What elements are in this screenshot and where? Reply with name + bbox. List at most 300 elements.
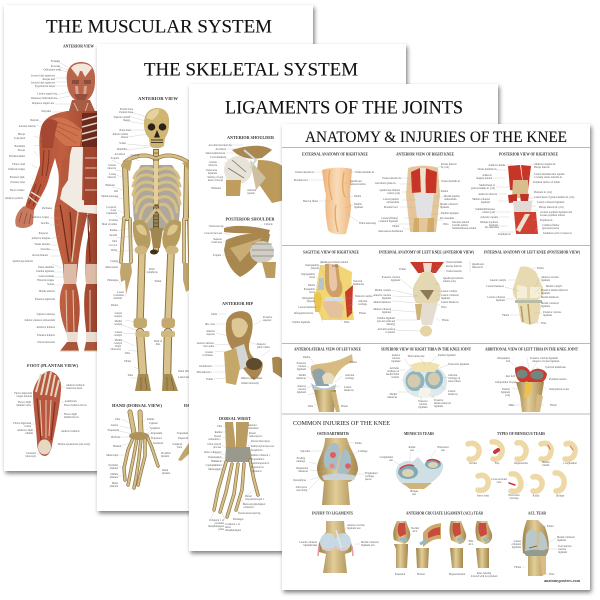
- labels: external knee: ligament: [354, 206, 363, 209]
- labels: posterior view: gastrocnemius m. (cut): [471, 187, 495, 190]
- labels: dorsal wrist: radioulnar: [248, 427, 259, 430]
- labels: anterolateral knee: cruciate: [298, 365, 307, 368]
- labels: osteoarthritis: Osteophytes: [293, 479, 306, 482]
- labels: muscular body: Sartorius: [41, 248, 50, 251]
- labels: internal knee anterior: Lateral condyle: [441, 290, 458, 293]
- labels: acl tear sequence: Extension: [395, 573, 406, 576]
- title: anatomy and injuries of the knee: ANATOMY & INJURIES OF THE KNEE: [305, 129, 567, 146]
- labels: internal knee anterior: Rectus femoris: [446, 265, 462, 268]
- labels: anterior view: Vastus lateralis m.: [382, 177, 401, 180]
- labels: hand skeleton: Trapezoid: [151, 437, 162, 440]
- labels: meniscus tears: Radial: [409, 446, 416, 449]
- labels: meniscus tears: tear: [441, 449, 445, 452]
- labels: osteoarthritis: Femur: [355, 442, 362, 445]
- labels: dorsal wrist: radiocarpal l.: [249, 435, 263, 438]
- labels: abditional tibia: Alar fold: [506, 375, 516, 378]
- labels: external knee: Tibial tuberosity: [359, 222, 377, 225]
- labels: dorsal wrist: Scaphoid b.: [251, 449, 264, 452]
- labels: posterior view: [471, 163, 574, 236]
- labels: types of meniscus tears: cleavage: [509, 497, 519, 500]
- labels: hand skeleton: Distal tibia: [178, 370, 190, 373]
- labels: anterior view: collateral ligament: [379, 220, 398, 223]
- labels: anterior hip: Inferior pubic ramus: [241, 377, 262, 380]
- labels: skeleton: tubercle: [108, 167, 117, 170]
- labels: anterior view: [375, 163, 477, 233]
- labels: posterior view: Medial head of: [479, 184, 495, 187]
- labels: anterior shoulder: ligament: [208, 172, 217, 175]
- labels: abditional tibia: Synovial membrane: [545, 366, 567, 369]
- labels: internal knee posterior: Anterior cruciate: [541, 276, 559, 279]
- labels: muscular body: Palmaris longus: [8, 168, 25, 171]
- labels: external knee: Quadriceps: [350, 180, 362, 183]
- labels: posterior shoulder: Clavicle: [264, 223, 273, 226]
- labels: dorsal wrist: proximal: [215, 522, 224, 525]
- labels: external knee: [294, 171, 377, 225]
- labels: external knee: Patella: [354, 195, 362, 198]
- labels: types of meniscus tears: Parrot beak: [477, 494, 490, 498]
- labels: sagittal knee: (fatpad): [311, 267, 319, 270]
- labels: superior tibia: cartilage on: [387, 370, 400, 373]
- labels: sagittal knee: Suprapatellar: [301, 273, 315, 276]
- labels: sagittal knee: (fatpad): [307, 300, 315, 303]
- labels: posterior view: Adductor: [482, 174, 492, 177]
- labels: anterolateral knee: ligament: [297, 391, 306, 394]
- labels: injury to ligaments: ligament tear: [303, 544, 317, 547]
- labels: foot plantar view: Abductor hallucis: [61, 430, 80, 433]
- labels: hand skeleton: Proximal: [108, 464, 118, 467]
- labels: posterior view: Tendinous arch of soleus m.: [543, 232, 572, 235]
- labels: anterior shoulder: Transverse: [206, 169, 218, 172]
- labels: internal knee posterior: Medial condyle: [546, 285, 563, 288]
- labels: skeleton: Pubis: [111, 249, 117, 252]
- labels: posterior shoulder: Coracoid process: [204, 232, 222, 235]
- labels: dorsal wrist: Dorsal: [214, 435, 221, 438]
- labels: muscular body: Patellar ligament: [36, 270, 54, 273]
- labels: hand skeleton: Pisiform: [111, 436, 120, 439]
- labels: superior tibia: Articular: [448, 374, 457, 377]
- labels: internal knee anterior: femoris m.: [472, 266, 484, 269]
- labels: muscular body: Long head: [14, 137, 26, 140]
- labels: dorsal wrist: Dorsal intercarpal: [251, 440, 270, 443]
- labels: dorsal wrist: Phalanges: [233, 518, 244, 521]
- labels: skeleton: tuberosity: [111, 348, 122, 351]
- figure: internal knee anterior: [410, 262, 444, 336]
- figure: external knee: [322, 168, 352, 234]
- labels: skeleton: Pubic: [149, 268, 156, 271]
- labels: injury to ligaments: ligament tear: [347, 527, 361, 530]
- labels: anterior view: Medial patellar: [444, 195, 460, 198]
- labels: acl tear detail: [511, 525, 575, 576]
- labels: internal knee anterior: of patella: [385, 331, 396, 334]
- labels: hand skeleton: Distal: [162, 469, 168, 472]
- labels: muscular body: Vastus lateralis: [34, 243, 50, 246]
- labels: types of meniscus tears: Bucket: [542, 461, 550, 464]
- labels: skeleton: Frontal bone: [120, 108, 134, 111]
- labels: sagittal knee: bursa: [309, 276, 316, 279]
- labels: osteoarthritis: pieces: [365, 478, 371, 481]
- labels: meniscus tears: Oblique: [410, 490, 419, 493]
- labels: foot plantar view: Flexor digiti: [64, 413, 77, 416]
- labels: posterior view: Articular capsule: [480, 216, 499, 219]
- labels: hand skeleton: Scaphoid: [150, 427, 160, 430]
- labels: muscular body: Biceps: [18, 133, 25, 136]
- labels: muscular body: Pronator teres: [11, 181, 25, 184]
- labels: external knee: Vastus lateralis m.: [295, 171, 314, 174]
- figure: osteoarthritis: [317, 438, 358, 505]
- labels: anterior shoulder: Acromion: [215, 148, 227, 151]
- labels: hand skeleton: phalanx: [161, 455, 170, 458]
- figure: muscular body: [15, 62, 100, 351]
- labels: posterior shoulder: Scapula: [213, 254, 222, 257]
- labels: muscular body: Brachialis: [14, 145, 25, 148]
- labels: hand skeleton: Proximal: [161, 452, 171, 455]
- labels: internal knee anterior: Anterior cruciate: [373, 294, 392, 297]
- labels: internal knee anterior: Tibia: [441, 306, 447, 309]
- title: the muscular system: THE MUSCULAR SYSTEM: [46, 16, 272, 38]
- labels: osteoarthritis: Cartilage: [358, 450, 368, 453]
- labels: anterior shoulder: Humerus: [211, 187, 221, 190]
- heading: posterior shoulder: POSTERIOR SHOULDER: [226, 218, 275, 222]
- heading: abditional view: ABDITIONAL VIEW OF LEFT TIBIA IN THE KNEE JOINT: [485, 348, 578, 352]
- labels: posterior view: Popliteus m.: [540, 219, 553, 222]
- labels: dorsal wrist: Ulna: [217, 425, 223, 428]
- labels: dorsal wrist: Triquetrum b.: [208, 456, 222, 459]
- labels: acl tear detail: Fibula: [514, 566, 522, 569]
- labels: dorsal wrist: Trapezium b.: [251, 458, 265, 461]
- labels: anterior shoulder: tubercle: [209, 164, 218, 167]
- labels: internal knee posterior: Tibia: [541, 322, 547, 325]
- labels: hand skeleton: Capitate: [149, 422, 158, 425]
- labels: internal knee anterior: tendon (cut): [443, 280, 456, 283]
- labels: dorsal wrist: process: [213, 446, 221, 449]
- labels: foot plantar view: Calcaneal: [26, 452, 36, 455]
- labels: posterior view: Adductor magnus m.: [534, 163, 556, 166]
- labels: internal knee posterior: Fibula: [502, 314, 510, 317]
- labels: meniscus tears: Longitudinal: [380, 456, 393, 459]
- labels: anterolateral knee: Posterior: [297, 362, 306, 365]
- labels: hand skeleton: Triquetrum: [107, 429, 119, 432]
- labels: anterior view: Fibula: [392, 225, 400, 228]
- labels: anterior hip: iliac spine: [203, 345, 215, 348]
- labels: internal knee posterior: Medial meniscus: [541, 296, 559, 299]
- labels: abditional tibia: Posterior cruciate ligament: [530, 357, 558, 360]
- labels: meniscus tears: tear: [389, 459, 393, 462]
- labels: muscular body: Depressor labii inferioris: [31, 97, 57, 100]
- labels: posterior view: Popliteus m.: [498, 233, 511, 236]
- labels: skeleton: Greater: [108, 164, 116, 167]
- labels: types of meniscus tears: view: [496, 481, 502, 484]
- labels: sagittal knee: bursa: [309, 291, 316, 294]
- labels: foot plantar view: brevis: [25, 425, 31, 428]
- labels: dorsal wrist: radioulnar l.: [208, 438, 221, 441]
- labels: superior tibia: Posterior: [418, 400, 428, 403]
- labels: superior tibia: meniscofemoral: [434, 402, 451, 405]
- labels: muscular body: Brachioradialis: [9, 155, 25, 158]
- labels: muscular body: Iliopsoas: [39, 232, 48, 235]
- labels: skeleton: Medial: [115, 339, 122, 342]
- labels: superior tibia: medial tibial: [386, 373, 399, 376]
- labels: osteoarthritis: Fragmented: [365, 472, 378, 475]
- labels: dorsal wrist: Collateral l. of: [209, 519, 224, 522]
- labels: anterior hip: superior: [206, 333, 215, 336]
- labels: muscular body: Rectus femoris: [32, 254, 48, 257]
- labels: skeleton: tubercle: [108, 176, 117, 179]
- labels: posterior view: Lateral head of gastrocnemius m. (cut): [534, 196, 574, 199]
- labels: anterior shoulder: Acromioclavicular lig.: [209, 144, 232, 147]
- labels: skeleton: Scapula: [111, 157, 120, 160]
- labels: muscular body: Levator anguli oris: [37, 92, 57, 96]
- labels: abditional tibia: Infrapatellar: [497, 357, 510, 360]
- labels: external knee: femoris tendon: [350, 183, 366, 186]
- labels: skeleton: tibia: [156, 343, 161, 346]
- labels: anterolateral knee: Femur: [350, 361, 357, 364]
- figure: acl tear sequence: [393, 521, 492, 568]
- labels: foot plantar view: Flexor digitorum: [14, 392, 32, 395]
- labels: hand skeleton: bone: [177, 446, 183, 449]
- heading: hand dorsal view: HAND (DORSAL VIEW): [112, 404, 163, 408]
- labels: anterior view: Sartorius tendon: [452, 221, 470, 224]
- labels: foot plantar view: Flexor digiti: [18, 401, 31, 404]
- labels: muscular body: Triceps: [17, 149, 25, 152]
- labels: posterior view: Adductor tubercle: [478, 193, 498, 196]
- figure: internal knee posterior: [513, 266, 543, 325]
- labels: injury to ligaments: Medial collateral: [361, 541, 379, 544]
- labels: foot plantar view: Flexor digitorum: [13, 422, 31, 425]
- labels: anterior hip: Anterior inferior: [197, 342, 214, 345]
- labels: acl tear sequence: Normal: [411, 527, 419, 530]
- heading: injury to ligaments: INJURY TO LIGAMENTS: [312, 512, 353, 516]
- labels: anterior view: tendon (cut): [387, 192, 400, 195]
- labels: hand skeleton: Metacarpal: [106, 454, 118, 457]
- labels: internal knee anterior: ligament: [382, 297, 391, 300]
- labels: dorsal wrist: Ulnar styloid: [207, 443, 222, 446]
- labels: anterolateral knee: ligament: [297, 368, 306, 371]
- labels: hand skeleton: Ulna: [115, 418, 121, 421]
- labels: acl tear sequence: Knee twisting: [477, 572, 492, 575]
- labels: dorsal wrist: Capitohamate l.: [206, 464, 222, 467]
- figure: posterior knee: [508, 165, 538, 234]
- labels: hand skeleton: Middle: [110, 473, 119, 476]
- labels: anterior view: Patellar ligament: [441, 212, 459, 215]
- labels: dorsal wrist: distal: [225, 526, 231, 529]
- labels: internal knee anterior: [373, 261, 484, 334]
- labels: anterolateral knee: Fibula: [341, 405, 348, 408]
- figure: posterior shoulder: [224, 226, 276, 278]
- labels: skeleton: Talus: [127, 374, 133, 377]
- labels: sagittal knee: Synovial: [353, 280, 363, 283]
- labels: internal knee anterior: Medial condyle: [375, 289, 392, 292]
- labels: anterior view: Quadriceps femoris: [380, 189, 400, 192]
- labels: skeleton: Acromion: [114, 153, 126, 156]
- labels: hand skeleton: phalanx: [110, 476, 119, 479]
- labels: muscular body: Gastrocnemius: [38, 275, 54, 278]
- labels: injury to ligaments: ligament tear: [361, 544, 375, 547]
- labels: muscular body: Gracilis: [41, 222, 49, 225]
- labels: internal knee anterior: Vastus medialis: [446, 261, 462, 264]
- labels: anterior view: m. (cut): [441, 166, 449, 169]
- labels: skeleton: Lateral: [115, 312, 122, 315]
- labels: types of meniscus tears: Normal: [469, 462, 477, 465]
- labels: types of meniscus tears: Cross-sectional: [491, 478, 507, 481]
- labels: anterior view: Rectus femoris: [441, 163, 457, 166]
- labels: sagittal knee: membrane: [353, 283, 365, 286]
- labels: muscular body: Abductor hallucis: [36, 326, 55, 329]
- labels: dorsal wrist: Capitotrapezoid l.: [251, 462, 270, 465]
- labels: hand skeleton: phalanx: [110, 467, 119, 470]
- credit: anatomyposters.com: anatomyposters.com: [544, 578, 581, 583]
- figure: meniscus tears: [396, 457, 443, 489]
- labels: anterior view: Pes anserinus: [440, 217, 454, 220]
- labels: skeleton: symphysis: [147, 271, 157, 274]
- labels: anterior view: Interosseous membrane: [378, 230, 404, 233]
- labels: anterolateral knee: cartilage: [345, 377, 355, 380]
- heading: superior view: SUPERIOR VIEW OF RIGHT TIBIA IN THE KNEE JOINT: [381, 348, 471, 352]
- labels: sagittal knee: Quadriceps femoris tendon: [320, 261, 349, 264]
- labels: skeleton: Lateral: [115, 331, 122, 334]
- labels: internal knee anterior: Posterior cruciate: [382, 276, 401, 279]
- labels: sagittal knee: cartilage: [358, 303, 368, 306]
- labels: anterior hip: Anterior: [206, 330, 215, 333]
- labels: superior tibia: cruciate: [392, 357, 401, 360]
- labels: skeleton: Vomer: [119, 142, 126, 145]
- labels: foot plantar view: Lumbricals: [65, 400, 77, 403]
- labels: posterior shoulder: Superior: [213, 238, 222, 241]
- labels: internal knee posterior: [486, 267, 568, 325]
- labels: anterior shoulder: Coracohumeral: [210, 156, 226, 159]
- labels: anterolateral knee: Tibia: [308, 405, 314, 408]
- labels: anterior hip: Ilium: [211, 313, 217, 316]
- labels: injury to ligaments: [299, 524, 379, 547]
- labels: skeleton: Tibia: [125, 352, 131, 355]
- labels: hand skeleton: Trapezoid: [178, 437, 189, 440]
- labels: skeleton: Clavicle: [130, 154, 140, 157]
- labels: posterior view: Biceps femoris: [534, 166, 550, 169]
- labels: anterior hip: Greater: [205, 351, 213, 354]
- labels: acl tear detail: collateral: [511, 543, 521, 546]
- labels: dorsal wrist: Metacarpal l.: [208, 468, 222, 471]
- labels: anterior hip: Iliac crest: [205, 323, 215, 326]
- heading: external anatomy: EXTERNAL ANATOMY OF RIGHT KNEE: [302, 152, 368, 156]
- labels: types of meniscus tears: Horizontal: [508, 494, 520, 497]
- labels: types of meniscus tears: Flap: [495, 462, 500, 465]
- labels: muscular body: Levator labii superioris: [31, 82, 55, 84]
- labels: abditional tibia: Infrapatellar fat pad: [495, 381, 517, 384]
- figure: acl tear detail: [522, 520, 549, 576]
- labels: internal knee posterior: ligament: [543, 314, 552, 317]
- labels: superior tibia: ligament: [391, 360, 401, 363]
- labels: anterolateral knee: [296, 356, 357, 408]
- labels: posterior view: magnus tendon: [476, 177, 493, 180]
- labels: muscular body: Dorsal interossei: [37, 341, 55, 344]
- section: row one: [294, 152, 574, 236]
- labels: anterior view: Articularis genus m.: [375, 182, 396, 185]
- labels: skeleton: Tibial: [115, 345, 121, 348]
- labels: anterolateral knee: Articular: [345, 374, 354, 377]
- labels: skeleton: Sacrum: [109, 234, 117, 237]
- labels: skeleton: Humerus: [105, 184, 115, 187]
- labels: internal knee anterior: ligament: [382, 311, 391, 314]
- labels: muscular body: Fibularis longus: [37, 279, 54, 282]
- section: common injuries: [293, 420, 581, 583]
- labels: skeleton: Rib: [114, 190, 119, 193]
- labels: skeleton: condyle: [114, 342, 123, 345]
- labels: sagittal knee: Femur: [332, 265, 339, 268]
- labels: anterior view: Semitendinosus tendon: [452, 227, 477, 230]
- figure: anterior hip: [224, 311, 285, 385]
- labels: posterior view: Biceps femoris m. (cut): [539, 206, 564, 209]
- heading: internal anatomy posterior: INTERNAL ANATOMY OF LEFT KNEE (POSTERIOR VIEW): [484, 250, 581, 254]
- labels: acl tear detail: ligament: [558, 551, 567, 554]
- labels: superior tibia: Tibial tuberosity: [407, 355, 425, 358]
- labels: internal knee anterior: Medial meniscus: [373, 301, 391, 304]
- labels: anterior hip: Pubofemoral l.: [197, 371, 212, 374]
- heading: anterior hip: ANTERIOR HIP: [222, 302, 254, 306]
- labels: anterior hip: Posterior: [263, 316, 273, 319]
- labels: meniscus tears: [380, 446, 449, 496]
- labels: dorsal wrist: Hamate b.: [211, 460, 222, 463]
- labels: acl tear detail: ligament: [512, 546, 521, 549]
- labels: skeleton: Carpals: [110, 260, 118, 263]
- labels: skeleton: Radius: [110, 229, 117, 232]
- labels: dorsal wrist: Dorsal metacarpal lig.: [238, 512, 261, 515]
- labels: abditional tibia: Popliteus tendon: [549, 378, 567, 381]
- labels: sagittal knee: Fibula: [359, 312, 366, 315]
- labels: skeleton: Xiphoid process: [101, 195, 118, 198]
- section: row three: [294, 348, 578, 412]
- labels: muscular body: Depressor anguli oris: [32, 102, 54, 105]
- labels: anterior view: ligament: [440, 206, 449, 209]
- labels: superior tibia: Anterior: [392, 354, 401, 357]
- labels: dorsal wrist: Capitate b.: [251, 470, 263, 473]
- labels: dorsal wrist: Dorsal: [249, 432, 256, 435]
- labels: anterolateral knee: meniscus: [296, 377, 306, 380]
- labels: skeleton: Head of radius: [102, 223, 117, 226]
- labels: posterior view: (peroneal) nerve: [542, 227, 560, 230]
- labels: acl tear detail: Tibia: [549, 573, 555, 576]
- labels: anterior view: Vastus medialis m.: [441, 180, 461, 183]
- labels: superior tibia: cartilage on: [448, 377, 461, 380]
- labels: internal knee posterior: ligament: [541, 279, 550, 282]
- labels: sagittal knee: Patella: [308, 284, 316, 287]
- labels: anterior hip: Iliofemoral l.: [199, 365, 213, 368]
- labels: dorsal wrist: Radial styloid process: [251, 445, 274, 448]
- labels: posterior view: Adductor hiatus: [488, 164, 505, 167]
- labels: anterior view: Medial collateral: [440, 203, 458, 206]
- figure: superior tibia: [403, 362, 447, 398]
- labels: abditional tibia: ligament: [501, 391, 510, 394]
- labels: muscular body: Orbicularis oculi: [43, 68, 61, 72]
- labels: skeleton: Ulna: [112, 240, 118, 243]
- figure: anterior knee: [406, 166, 440, 232]
- labels: anterior shoulder: Articular: [247, 189, 256, 192]
- labels: foot plantar view: Abductor digiti: [17, 429, 33, 432]
- labels: muscular body: Platysma: [41, 110, 52, 113]
- figure: injury to ligaments: [318, 521, 353, 573]
- title: the skeletal system: THE SKELETAL SYSTEM: [144, 60, 358, 80]
- labels: internal knee anterior: Femur: [399, 268, 406, 271]
- labels: internal knee anterior: (cut and reflected: [377, 320, 396, 323]
- labels: superior tibia: ligament: [418, 406, 428, 409]
- labels: skeleton: Lesser: [109, 173, 116, 176]
- labels: foot plantar view: minimi brevis: [17, 404, 31, 407]
- labels: osteoarthritis: narrowing: [296, 489, 308, 492]
- labels: skeleton: condyle: [114, 334, 123, 337]
- labels: skeleton: fossa: [111, 209, 117, 212]
- labels: superior tibia: Patellar ligament: [438, 354, 456, 357]
- labels: posterior view: Plantaris m. (cut): [534, 191, 552, 194]
- labels: superior tibia: Medial: [390, 393, 397, 396]
- labels: skeleton: Patella: [111, 304, 119, 307]
